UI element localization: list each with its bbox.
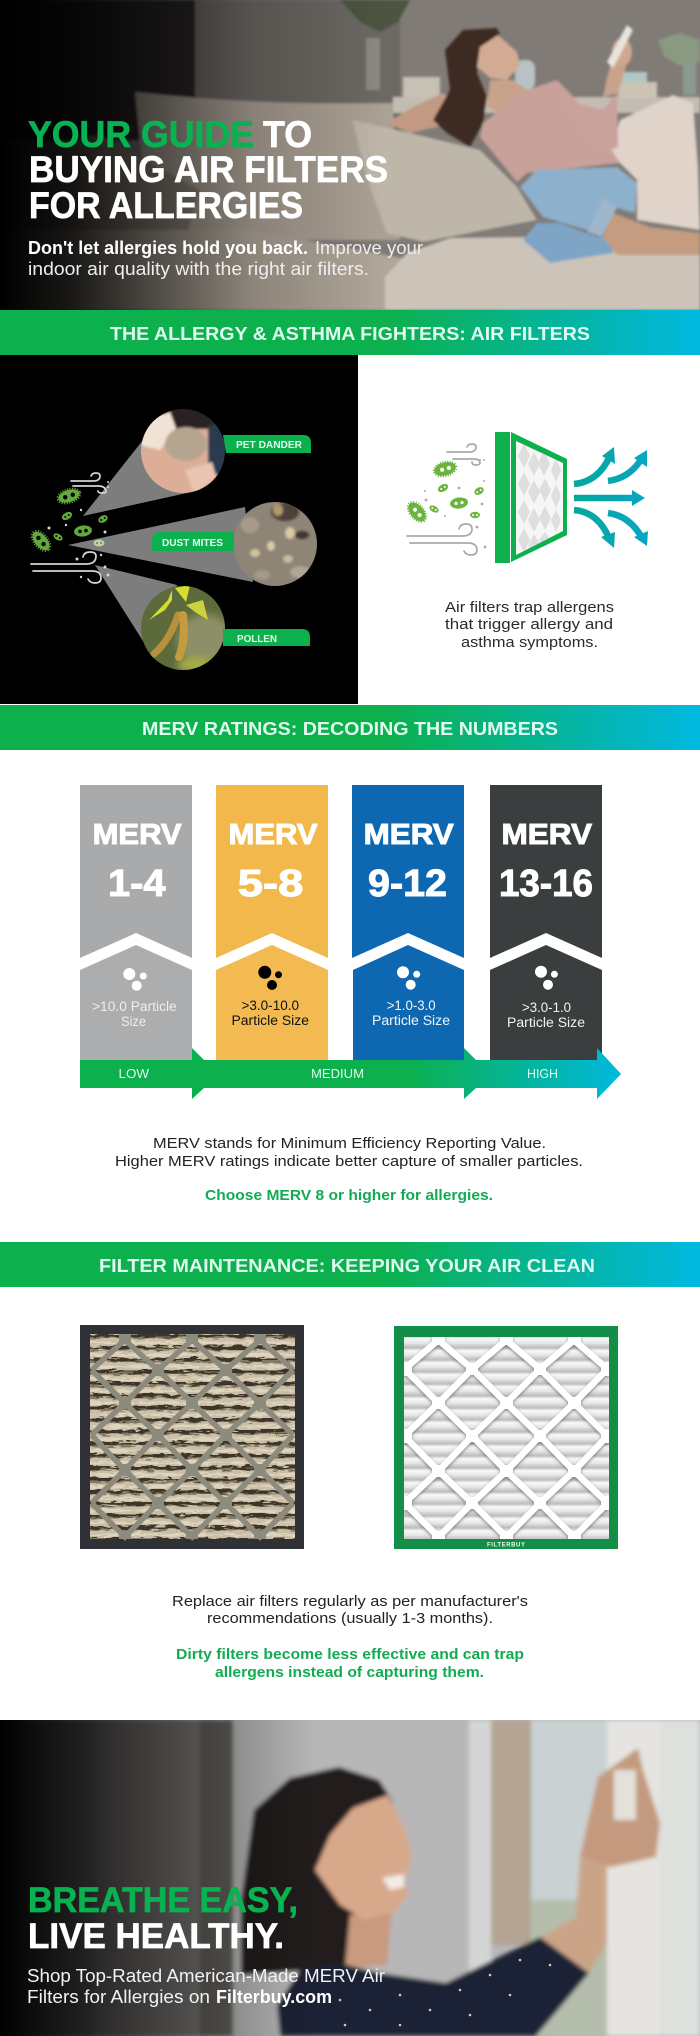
hero subheading <box>28 238 423 279</box>
photo: pet dander <box>141 409 225 493</box>
label: pet dander: PET DANDER <box>236 440 303 451</box>
panel: footer <box>0 1720 700 2036</box>
panel: air filter explanation <box>406 432 648 650</box>
text: filter explanation <box>445 599 614 651</box>
card: MERV 1-4: 1-4 <box>108 863 166 905</box>
label: dust mites <box>152 532 234 551</box>
footer call to action: Filterbuy.com <box>216 1987 332 2007</box>
footer call to action: Shop Top-Rated American-Made MERV Air <box>27 1966 385 1986</box>
card: MERV 1-4: MERV <box>93 819 182 851</box>
text: filter explanation: asthma symptoms. <box>461 634 598 651</box>
card: MERV 5-8: 5-8 <box>238 863 303 905</box>
footer heading: BREATHE EASY, <box>28 1881 298 1920</box>
callout: dirty filters warning: Dirty filters become less effective and can trap <box>176 1646 524 1663</box>
arrow: efficiency scale <box>80 1048 621 1099</box>
text: MERV explanation: Higher MERV ratings indicate better capture of smaller particles. <box>115 1153 583 1170</box>
arrow: efficiency scale: LOW <box>118 1066 150 1081</box>
icon: air filter <box>495 432 567 563</box>
card: MERV 5-8: MERV <box>228 819 318 851</box>
hero subheading: Improve your <box>315 238 423 258</box>
panel: filter maintenance <box>80 1325 619 1681</box>
text: filter explanation: that trigger allergy and <box>445 616 613 633</box>
card: MERV 13-16: Particle Size <box>507 1015 585 1030</box>
footer call to action: Filters for Allergies on <box>27 1987 210 2007</box>
icon: wind on white <box>407 444 480 555</box>
card: MERV 1-4: Size <box>121 1014 146 1029</box>
label: pollen: POLLEN <box>237 634 277 645</box>
footer dark gradient overlay <box>0 1720 700 2036</box>
card: MERV 5-8: >3.0-10.0 <box>242 998 299 1013</box>
card: MERV 13-16: MERV <box>502 819 593 851</box>
image: clean filter: FILTERBUY <box>487 1542 525 1548</box>
callout: choose MERV 8: Choose MERV 8 or higher for allergies. <box>205 1187 493 1204</box>
card: MERV 13-16 <box>490 785 602 1061</box>
card: MERV 13-16: 13-16 <box>499 863 593 905</box>
panel: allergens on black <box>0 355 358 704</box>
card: MERV 9-12: MERV <box>364 819 454 851</box>
text: replacement advice <box>172 1593 528 1627</box>
image: clean filter <box>394 1326 619 1549</box>
card: MERV 1-4: >10.0 Particle <box>92 999 177 1014</box>
hero heading: FOR ALLERGIES <box>29 185 303 226</box>
callout: dirty filters warning <box>176 1646 524 1681</box>
arrow: efficiency scale: MEDIUM <box>311 1066 364 1081</box>
hero heading <box>28 114 388 226</box>
label: pollen <box>223 629 310 646</box>
footer call to action <box>27 1966 385 2007</box>
callout: dirty filters warning: allergens instead of capturing them. <box>215 1664 484 1681</box>
hero dark gradient overlay <box>0 0 700 310</box>
footer photo: woman opening curtain <box>0 1720 700 2036</box>
footer heading <box>28 1881 298 1956</box>
card: MERV 9-12: 9-12 <box>368 863 447 905</box>
banner: allergy and asthma fighters: THE ALLERGY & ASTHMA FIGHTERS: AIR FILTERS <box>110 324 590 344</box>
hero heading: BUYING AIR FILTERS <box>29 149 388 190</box>
particles on white <box>424 459 486 548</box>
text: replacement advice: Replace air filters regularly as per manufacturer's <box>172 1593 528 1610</box>
cones from allergens <box>68 440 253 657</box>
text: filter explanation: Air filters trap allergens <box>445 599 614 616</box>
banner: filter maintenance <box>0 1242 700 1287</box>
footer heading: LIVE HEALTHY. <box>28 1917 284 1956</box>
card: MERV 5-8 <box>216 785 328 1061</box>
icon: wind on black <box>31 473 106 583</box>
icon: germs on black <box>29 487 109 553</box>
card: MERV 1-4 <box>80 785 192 1061</box>
icon: germs on white <box>405 460 485 525</box>
label: dust mites: DUST MITES <box>162 538 223 549</box>
banner: filter maintenance: FILTER MAINTENANCE: KEEPING YOUR AIR CLEAN <box>99 1256 595 1276</box>
text: MERV explanation: MERV stands for Minimum Efficiency Reporting Value. <box>153 1135 546 1152</box>
hero subheading: indoor air quality with the right air filters. <box>28 259 369 279</box>
particles on black <box>48 481 110 578</box>
card: MERV 13-16: >3.0-1.0 <box>522 1000 571 1015</box>
label: pet dander <box>223 435 311 453</box>
icon: clean air arrows <box>574 447 648 548</box>
hero subheading: Don't let allergies hold you back. <box>28 238 308 258</box>
card: MERV 9-12: >1.0-3.0 <box>387 998 436 1013</box>
arrow: efficiency scale: HIGH <box>527 1066 558 1081</box>
image: dirty filter <box>80 1325 305 1549</box>
text: replacement advice: recommendations (usually 1-3 months). <box>207 1610 493 1627</box>
photo: pollen <box>141 586 225 670</box>
hero heading: TO <box>263 114 312 155</box>
banner: allergy and asthma fighters <box>0 310 700 355</box>
hero heading: YOUR GUIDE <box>28 114 254 155</box>
banner: MERV ratings <box>0 705 700 750</box>
panel: hero <box>0 0 700 310</box>
hero photo: woman relaxing on sofa <box>0 0 700 310</box>
text: MERV explanation <box>115 1135 583 1170</box>
photo: dust mites <box>232 501 318 587</box>
card: MERV 9-12 <box>352 785 464 1061</box>
panel: MERV ratings <box>80 785 621 1204</box>
card: MERV 9-12: Particle Size <box>372 1013 450 1028</box>
banner: MERV ratings: MERV RATINGS: DECODING THE NUMBERS <box>142 719 558 739</box>
card: MERV 5-8: Particle Size <box>232 1013 309 1028</box>
